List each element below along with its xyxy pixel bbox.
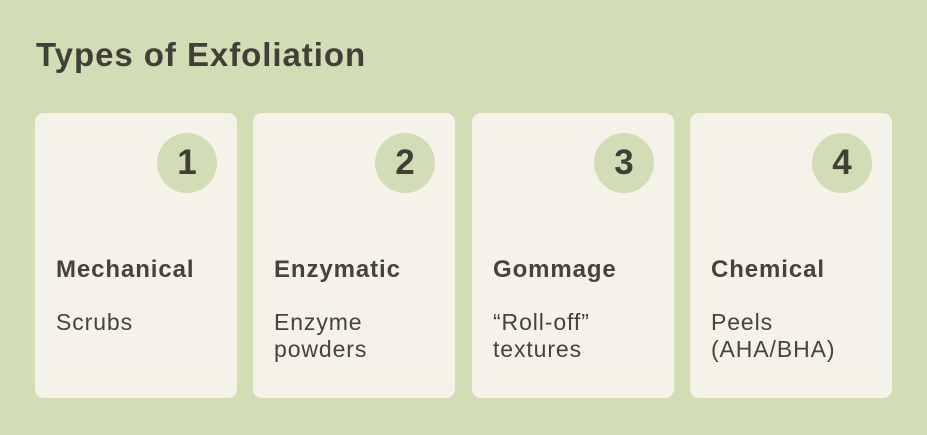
text: Roll-off textures: textures [493, 336, 582, 362]
panel: enzymatic [253, 113, 455, 398]
heading: Mechanical: Mechanical [56, 256, 194, 283]
badge: 2 [375, 133, 435, 193]
heading: Enzymatic: Enzymatic [274, 256, 401, 283]
badge: 2: 2 [395, 143, 415, 182]
text: Peels [711, 309, 835, 362]
text: Scrubs: Scrubs [56, 309, 133, 335]
text: Roll-off textures [493, 309, 590, 362]
text: Peels: (AHA/BHA) [711, 336, 835, 362]
text: Roll-off textures: “Roll-off” [493, 309, 590, 335]
heading: Chemical: Chemical [711, 256, 825, 283]
badge: 1 [157, 133, 217, 193]
badge: 3: 3 [614, 143, 634, 182]
panel: chemical [690, 113, 892, 398]
badge: 3 [594, 133, 654, 193]
panel: gommage [472, 113, 674, 398]
panel: mechanical [35, 113, 237, 398]
title: Types of Exfoliation [36, 36, 366, 73]
heading: Gommage: Gommage [493, 256, 617, 283]
text: Enzyme powders: Enzyme [274, 309, 362, 335]
text: Enzyme powders [274, 309, 367, 362]
badge: 4 [812, 133, 872, 193]
badge: 1: 1 [177, 143, 197, 182]
text: Peels: Peels [711, 309, 773, 335]
badge: 4: 4 [832, 143, 852, 182]
text: Enzyme powders: powders [274, 336, 367, 362]
